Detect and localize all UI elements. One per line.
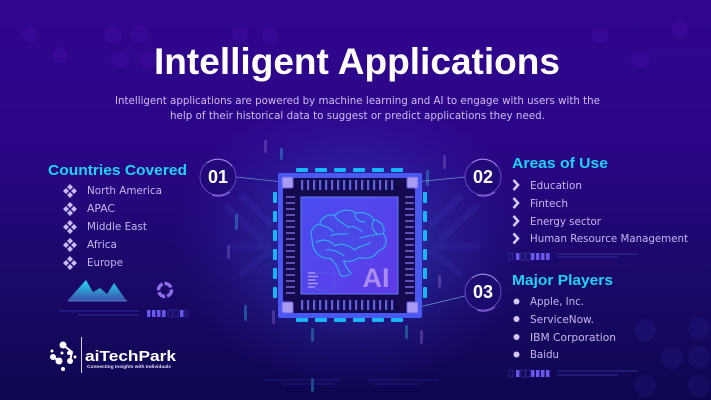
badge 02: [465, 159, 501, 196]
list: [530, 180, 688, 245]
intro text: help of their historical data to suggest or predict applications they need.: [170, 109, 545, 122]
connector lines: [236, 177, 465, 308]
list: ServiceNow.: [530, 314, 594, 326]
list: Europe: [87, 257, 123, 269]
list: Fintech: [530, 198, 568, 210]
wordmark: aiTechPark: [85, 348, 177, 365]
list: Africa: [87, 239, 117, 251]
bottom center decoration: [264, 380, 438, 384]
corner pads: [282, 177, 418, 313]
AI label: AI: [362, 263, 390, 293]
badge 03: [465, 274, 501, 311]
heading: Countries Covered: [48, 162, 187, 179]
icon: logo network: [50, 342, 76, 371]
badge 01: [200, 159, 236, 196]
panel: countries covered: [48, 162, 187, 270]
list: Apple, Inc.: [530, 296, 584, 308]
list: Energy sector: [530, 216, 602, 228]
intro text: [115, 94, 600, 122]
list: Human Resource Management: [530, 233, 688, 245]
heading: Major Players: [512, 272, 613, 289]
chip contacts: [301, 185, 397, 305]
chip core: [301, 197, 398, 294]
intro text: Intelligent applications are powered by machine learning and AI to engage with users with the: [115, 94, 600, 107]
icon: dots: [514, 298, 520, 358]
heading: Areas of Use: [512, 155, 608, 172]
badge 01: 01: [208, 167, 228, 187]
divider right lower: [509, 370, 638, 377]
badge 03: 03: [473, 282, 493, 302]
icon: chevrons: [514, 180, 518, 244]
list: Baidu: [530, 349, 559, 361]
small data lines: [308, 273, 318, 287]
logo: aiTechPark: [50, 337, 177, 373]
panel: areas of use: [512, 155, 688, 245]
list: Education: [530, 180, 582, 192]
list: Middle East: [87, 221, 147, 233]
icon: diamond bullets: [63, 184, 77, 270]
divider right upper: [509, 253, 638, 260]
list: APAC: [87, 203, 115, 215]
chip pins: [273, 168, 427, 322]
list: [87, 185, 162, 269]
title: Intelligent Applications: [154, 41, 560, 82]
tagline: Connecting Insights with Individuals: [87, 364, 171, 370]
list: North America: [87, 185, 162, 197]
badge 02: 02: [473, 167, 493, 187]
icon: brain: [311, 210, 386, 276]
panel: AI chip: [273, 168, 427, 322]
list: [530, 296, 616, 361]
divider left: [59, 310, 188, 317]
icon: mountain chart: [68, 280, 127, 302]
panel: major players: [512, 272, 616, 361]
icon: donut chart: [158, 284, 172, 296]
list: IBM Corporation: [530, 332, 616, 344]
